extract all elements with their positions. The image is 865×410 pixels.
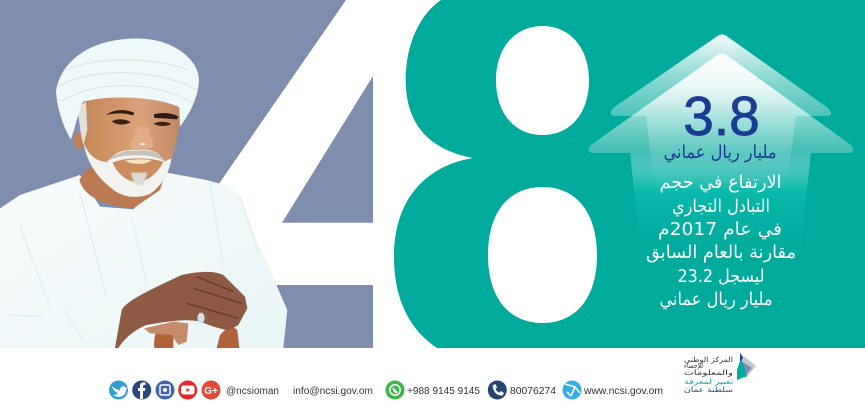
NCSI logo bbox=[684, 353, 756, 394]
neck bbox=[79, 168, 167, 208]
description text: التبادل التجاري bbox=[672, 196, 770, 217]
icon: twitter bbox=[109, 380, 128, 400]
handle: @ncsioman bbox=[226, 386, 279, 397]
turban bbox=[56, 38, 199, 139]
icon: google plus: G+ bbox=[204, 386, 218, 397]
back arrow bbox=[611, 34, 831, 190]
mouth bbox=[125, 159, 152, 164]
icon: facebook bbox=[132, 380, 151, 400]
moustache bbox=[109, 151, 165, 161]
big numeral 8 on teal panel bbox=[394, 0, 865, 348]
icon: youtube bbox=[178, 380, 197, 400]
cane bbox=[154, 325, 239, 348]
nose bbox=[130, 127, 153, 150]
description text: مليار ريال عماني bbox=[660, 289, 772, 310]
lower face bbox=[113, 158, 163, 182]
icon: globe bbox=[562, 380, 582, 400]
website: www.ncsi.gov.om bbox=[583, 386, 663, 397]
logo name text: والمعلومات bbox=[684, 369, 733, 377]
robe bbox=[0, 173, 287, 348]
portrait of the Sultan bbox=[0, 38, 287, 348]
logo name text bbox=[684, 356, 733, 394]
logo name text: للإحصاء bbox=[684, 362, 703, 370]
footer contact bar bbox=[109, 380, 663, 400]
icon: phone bbox=[488, 380, 507, 400]
turban wraps bbox=[58, 60, 197, 103]
headline figure: 3.8 bbox=[683, 85, 760, 147]
ear bbox=[74, 132, 84, 149]
logo name text: تعبير لمعرفة bbox=[684, 378, 733, 386]
robe folds bbox=[7, 183, 258, 340]
description text: مقارنة بالعام السابق bbox=[646, 242, 796, 263]
face bbox=[81, 97, 180, 195]
toll-free number: 80076274 bbox=[510, 386, 556, 397]
email: info@ncsi.gov.om bbox=[293, 386, 373, 397]
goatee bbox=[131, 173, 147, 185]
unit label: مليار ريال عماني bbox=[664, 142, 776, 163]
logo mark bbox=[737, 353, 756, 380]
icon: instagram bbox=[156, 380, 174, 400]
icon: google plus bbox=[202, 380, 220, 400]
eyes bbox=[112, 119, 171, 126]
description text: في عام 2017م bbox=[658, 219, 782, 240]
ring bbox=[197, 313, 205, 323]
blue background panel bbox=[0, 0, 373, 348]
arrow graphic bbox=[589, 34, 853, 300]
description text bbox=[646, 172, 796, 310]
description text: الارتفاع في حجم bbox=[660, 172, 782, 193]
big numeral 4 bbox=[180, 0, 373, 285]
phone number: +988 9145 9145 bbox=[407, 386, 480, 397]
nose tip bbox=[140, 143, 145, 145]
logo name text: المركز الوطني bbox=[684, 356, 733, 364]
description text: ليسجل 23.2 bbox=[678, 266, 764, 287]
lower finger bbox=[144, 322, 188, 345]
eyebrows bbox=[106, 110, 179, 119]
finger lines bbox=[187, 277, 242, 318]
icon: whatsapp bbox=[386, 380, 404, 400]
temple hair bbox=[77, 102, 87, 145]
logo name text: سلطنة عمان bbox=[684, 386, 733, 394]
hand bbox=[115, 272, 247, 348]
beard bbox=[83, 142, 171, 197]
front arrow bbox=[589, 54, 853, 300]
